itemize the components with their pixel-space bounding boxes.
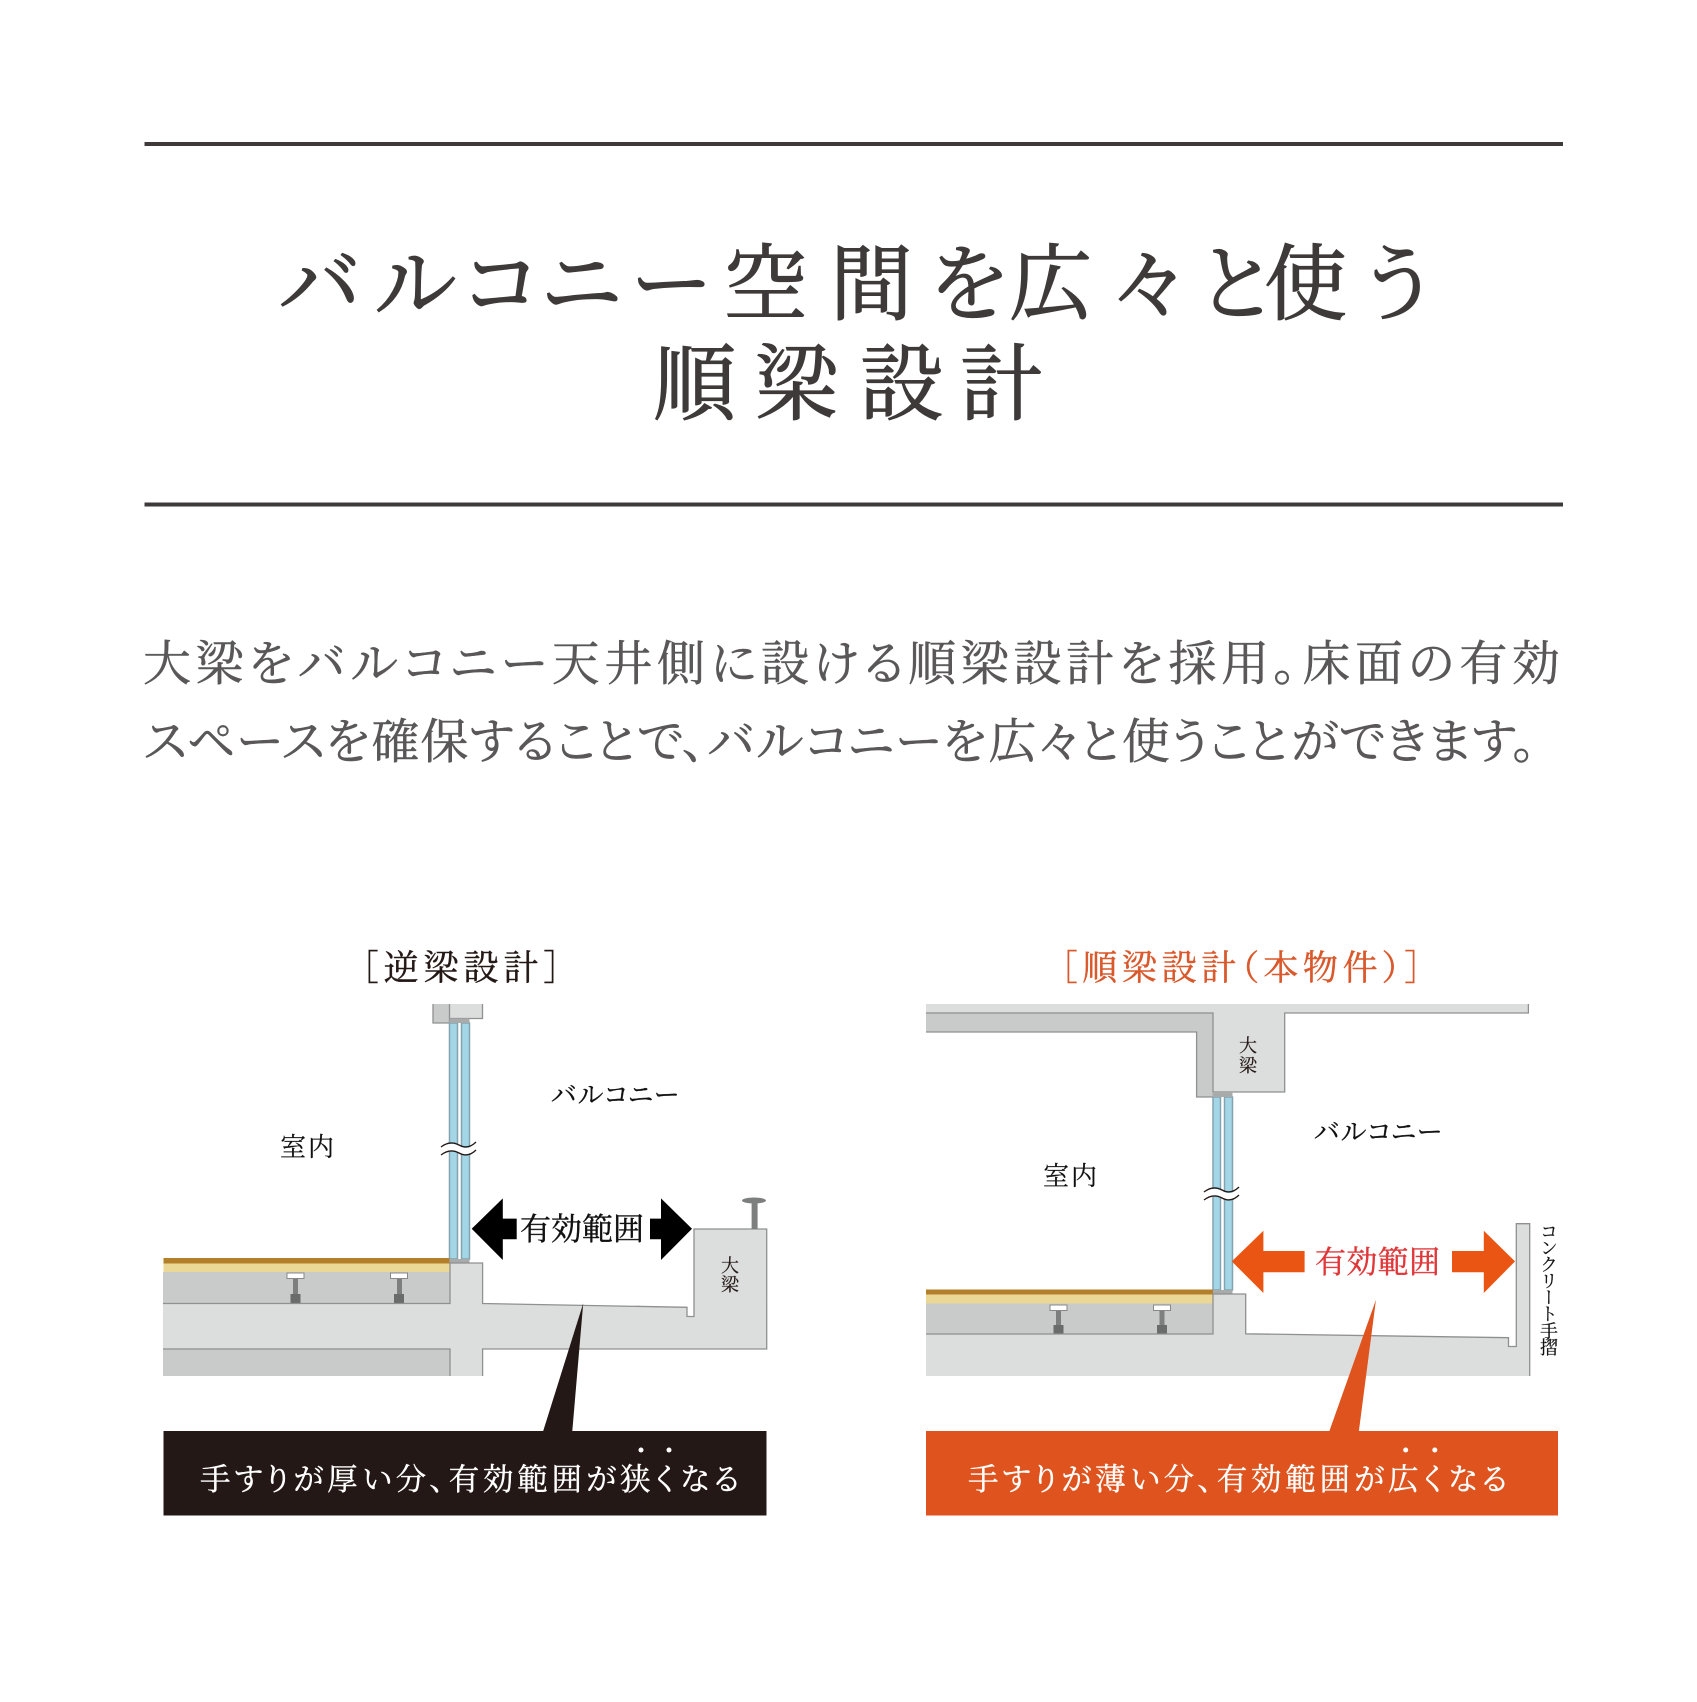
heading: reverse beam: ［逆梁設計］ (361, 949, 561, 988)
callout box: 手すりが厚い分、有効範囲が狭くなる (200, 1463, 739, 1497)
callout pointer (1329, 1300, 1376, 1431)
concrete slab with rail (926, 1224, 1530, 1376)
heading: standard beam: ［順梁設計（本物件）］ (1060, 949, 1422, 988)
floor finish (926, 1290, 1213, 1304)
body text: スペースを確保することで、バルコニーを広々と使うことができます。 (143, 716, 1537, 769)
beam label (1239, 1036, 1258, 1076)
sliding window glass (450, 1018, 470, 1263)
floor supports (287, 1273, 408, 1303)
floor finish (164, 1258, 450, 1272)
label: indoor: 室内 (280, 1133, 334, 1162)
arrow right (650, 1198, 692, 1260)
callout box: 手すりが薄い分、有効範囲が広くなる (968, 1463, 1507, 1497)
beam label: 梁 (1239, 1055, 1258, 1076)
beam label: 大 (721, 1256, 739, 1276)
callout pointer (543, 1303, 583, 1431)
arrow left (472, 1198, 517, 1260)
label: balcony: バルコニー (551, 1081, 679, 1110)
callout box (164, 1431, 766, 1516)
panel: standard beam design (926, 949, 1558, 1516)
ceiling slab and beam (926, 1004, 1528, 1092)
body text: 大梁をバルコニー天井側に設ける順梁設計を採用。床面の有効 (143, 638, 1560, 691)
body text (143, 638, 1560, 769)
sliding window glass (1212, 1092, 1232, 1294)
underfloor space (163, 1272, 450, 1304)
label: balcony: バルコニー (1314, 1118, 1442, 1147)
underfloor space (926, 1304, 1213, 1334)
break mark (441, 1142, 476, 1155)
callout box (926, 1431, 1558, 1516)
beam label: 大 (1239, 1036, 1257, 1056)
label: concrete handrail: コンクリート手摺 (1538, 1222, 1558, 1356)
concrete slab with beam (163, 1229, 767, 1376)
arrow right (1452, 1231, 1515, 1293)
lower ceiling void (163, 1349, 450, 1376)
title (279, 239, 1428, 431)
ceiling finish (926, 1013, 1213, 1097)
break mark (1204, 1187, 1239, 1200)
top beam block (433, 1004, 482, 1023)
title: バルコニー空間を広々と使う (279, 239, 1428, 331)
label: effective range: 有効範囲 (1315, 1245, 1440, 1280)
handrail (742, 1198, 766, 1229)
title: 順梁設計 (653, 339, 1043, 431)
panel: reverse beam design (163, 949, 767, 1516)
arrow left (1232, 1231, 1305, 1293)
beam label: 梁 (721, 1274, 740, 1295)
label: indoor: 室内 (1043, 1162, 1097, 1191)
label: effective range: 有効範囲 (520, 1212, 644, 1247)
floor supports (1050, 1305, 1170, 1334)
beam label (721, 1256, 740, 1295)
